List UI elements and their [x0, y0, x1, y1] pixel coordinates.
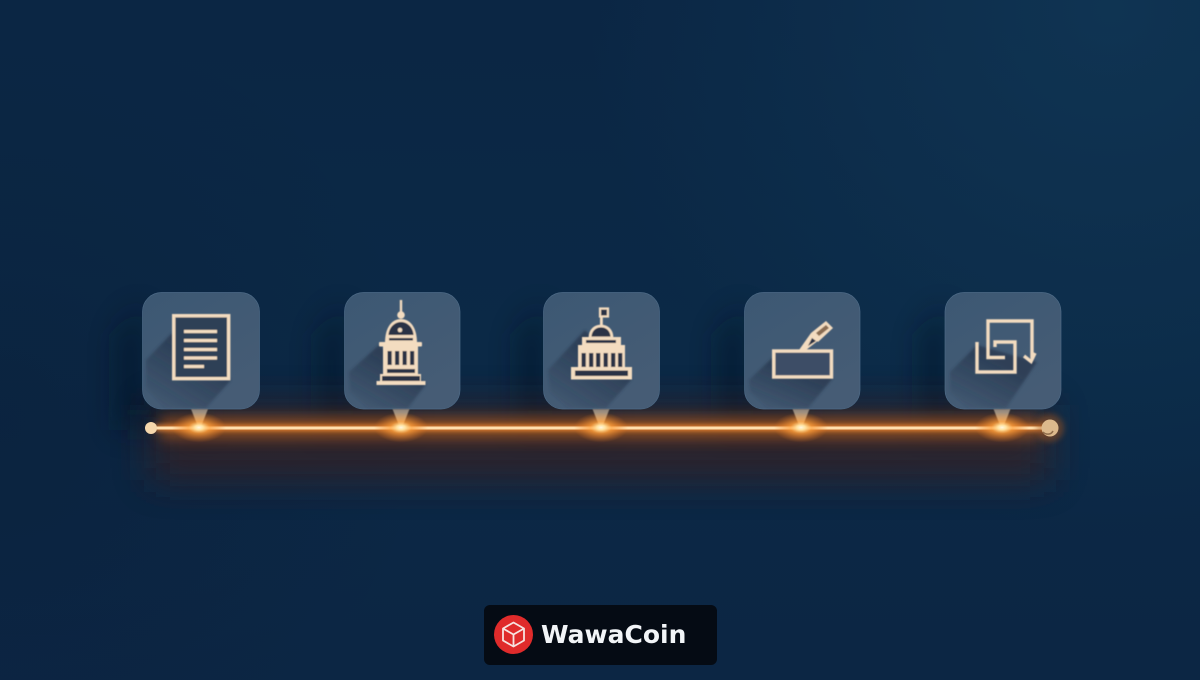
card shadows — [118, 305, 1005, 430]
card 5 body — [945, 292, 1061, 428]
icon 5 long shadow — [950, 345, 1037, 408]
icon: flag building — [571, 308, 632, 380]
timeline nodes — [172, 412, 1029, 442]
line — [155, 426, 1045, 430]
icon 1 long shadow — [146, 333, 231, 408]
icon 3 long shadow — [548, 330, 632, 408]
icon: domed building — [376, 300, 426, 385]
icon 4 long shadow — [749, 358, 833, 408]
card 2 body — [344, 292, 460, 428]
card 4: pen and box — [744, 292, 860, 428]
icon 2 long shadow — [349, 345, 426, 408]
card 1: document — [142, 292, 260, 428]
icon: pen signing box — [774, 321, 833, 377]
card 5: looping arrow — [945, 292, 1061, 428]
brand name: WawaCoin — [541, 620, 686, 649]
line glow — [155, 425, 1048, 431]
logo badge — [484, 605, 717, 665]
card 3: flag capitol — [544, 292, 660, 428]
icon: loop arrow — [977, 321, 1035, 372]
logo icon: red cube — [494, 615, 533, 654]
icon: document — [174, 316, 229, 379]
end cap — [1036, 414, 1064, 442]
card 4 body — [744, 292, 860, 428]
card 3 body — [544, 292, 660, 428]
card 1 body — [142, 292, 260, 428]
timeline ambient glow — [150, 405, 1050, 480]
timeline — [145, 412, 1064, 442]
card 2: domed capitol — [344, 292, 460, 428]
start cap — [145, 422, 157, 434]
